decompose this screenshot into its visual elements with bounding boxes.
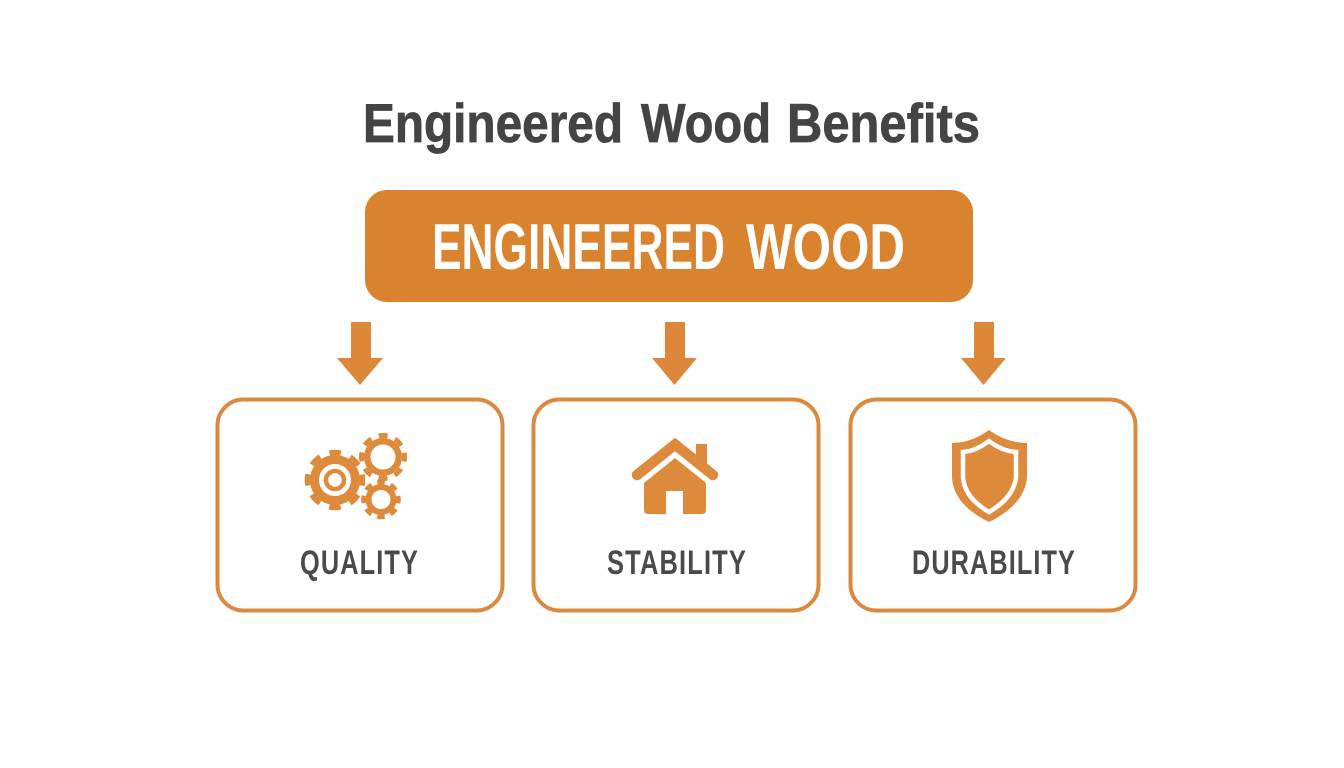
label: durability: DURABILITY [912,544,1076,582]
arrow: to quality [337,322,383,385]
title: Wood [641,92,771,154]
arrow: to durability [961,322,1006,385]
panel: durability [850,400,1136,610]
label: stability: STABILITY [607,544,747,582]
banner: engineered wood [365,190,973,302]
title: Engineered [363,92,623,154]
title [363,92,980,154]
label: quality: QUALITY [300,544,419,582]
title: Benefits [787,92,980,154]
banner: engineered wood: WOOD [746,210,905,283]
banner: engineered wood: ENGINEERED [432,210,725,283]
panel: quality [218,400,502,610]
icon: shield [952,430,1027,522]
panel: stability [534,400,818,610]
icon: gears [308,436,404,517]
icon: house [637,444,713,514]
arrow: to stability [652,322,697,385]
